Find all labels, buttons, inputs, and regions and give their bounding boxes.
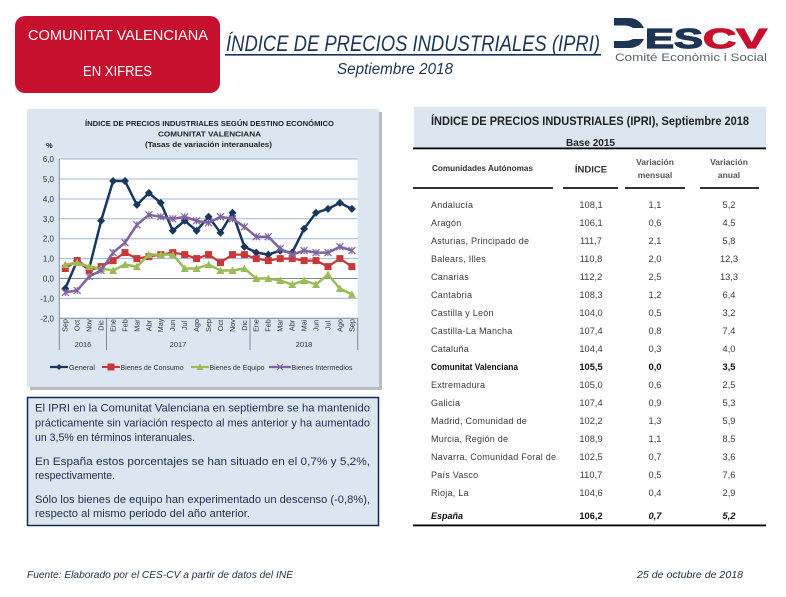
table rows: 1,1 bbox=[649, 434, 661, 444]
x axis month labels: Nov bbox=[228, 319, 237, 332]
table rows: Aragón bbox=[431, 218, 462, 228]
table column headers: Comunidades Autónomas bbox=[432, 163, 533, 173]
text box: summary bbox=[28, 398, 378, 526]
x axis month labels: Ene bbox=[108, 319, 118, 332]
x axis month labels: Ago bbox=[192, 319, 201, 332]
table rows: 3,2 bbox=[723, 308, 735, 318]
text box: summary: un 3,5% en términos interanuales. bbox=[35, 432, 195, 444]
table total row: España: 5,2 bbox=[723, 511, 736, 521]
table rows: 5,9 bbox=[723, 416, 735, 426]
table rows: Balears, Illes bbox=[431, 254, 486, 264]
x axis year labels bbox=[75, 340, 312, 349]
table rows: 0,3 bbox=[649, 344, 661, 354]
table rows: Andalucía bbox=[431, 200, 473, 210]
table rows: 0,8 bbox=[649, 326, 661, 336]
table rows: 108,9 bbox=[579, 434, 603, 444]
table rows: País Vasco bbox=[431, 470, 478, 480]
table rows: Cantabria bbox=[431, 290, 472, 300]
table rows: 110,7 bbox=[580, 470, 602, 480]
table rows: 102,2 bbox=[579, 416, 603, 426]
x axis month labels: Dic bbox=[240, 320, 249, 331]
text box: summary: respecto al mismo periodo del año anterior. bbox=[35, 508, 250, 520]
x axis year labels: 2018 bbox=[296, 340, 312, 349]
table column headers: mensual bbox=[638, 170, 672, 180]
x axis month labels: Ene bbox=[252, 319, 261, 332]
red badge: Comunitat Valenciana en xifres: COMUNITAT VALENCIANA bbox=[28, 27, 208, 44]
table column headers: ÍNDICE bbox=[575, 164, 607, 176]
table rows: 7,4 bbox=[723, 326, 735, 336]
table rows: Castilla-La Mancha bbox=[431, 326, 513, 336]
table column headers: anual bbox=[718, 170, 740, 180]
chart legend: Bienes de Consumo bbox=[120, 363, 184, 372]
table rows: 104,0 bbox=[579, 308, 603, 318]
table rows: 112,2 bbox=[580, 272, 602, 282]
table rows: Murcia, Región de bbox=[431, 434, 508, 444]
x axis month labels: Dic bbox=[96, 320, 106, 331]
table rows: 0,5 bbox=[649, 470, 661, 480]
table rows: 108,1 bbox=[579, 200, 603, 210]
x axis month labels: Abr bbox=[144, 319, 153, 331]
table rows: 12,3 bbox=[720, 254, 738, 264]
x axis month labels: Ago bbox=[335, 319, 344, 332]
x axis month labels: Mar bbox=[132, 319, 141, 332]
series: Bienes de Equipo bbox=[65, 255, 352, 294]
logo: CES-CV: CV bbox=[703, 23, 768, 54]
table rows: 5,8 bbox=[723, 236, 735, 246]
table rows: 5,3 bbox=[723, 398, 735, 408]
subtitle: date: Septiembre 2018 bbox=[337, 61, 453, 78]
table rows: 111,7 bbox=[580, 236, 602, 246]
table rows: 1,1 bbox=[649, 200, 661, 210]
table column headers: Variación bbox=[710, 157, 748, 167]
x axis month labels: May bbox=[156, 318, 165, 332]
table rows: 107,4 bbox=[579, 398, 603, 408]
table rows: 0,4 bbox=[649, 488, 661, 498]
chart title: % bbox=[46, 141, 53, 150]
table rows: 0,6 bbox=[649, 218, 661, 228]
table rows: 4,0 bbox=[723, 344, 735, 354]
table rows: Rioja, La bbox=[431, 488, 469, 498]
series: Bienes Intermedios bbox=[65, 215, 352, 292]
x axis month labels: Sep bbox=[204, 319, 213, 332]
table rows: Canarias bbox=[431, 272, 469, 282]
y axis labels: -2,0 bbox=[40, 314, 55, 323]
table rows: 104,6 bbox=[579, 488, 603, 498]
table rows: 2,9 bbox=[723, 488, 735, 498]
text box: summary: En España estos porcentajes se han situado en el 0,7% y 5,2%, bbox=[35, 456, 370, 468]
footer: source: Fuente: Elaborado por el CES-CV a partir de datos del INE bbox=[27, 569, 294, 581]
x axis month labels: Nov bbox=[85, 319, 94, 332]
table column headers bbox=[413, 157, 759, 189]
table rows: 13,3 bbox=[720, 272, 738, 282]
table rows: 2,5 bbox=[649, 272, 661, 282]
table rows: 102,5 bbox=[579, 452, 603, 462]
table rows: 0,9 bbox=[649, 398, 661, 408]
table rows: 8,5 bbox=[723, 434, 735, 444]
chart title: ÍNDICE DE PRECIOS INDUSTRIALES SEGÚN DESTINO ECONÓMICO bbox=[85, 119, 334, 128]
x axis month labels: Jun bbox=[168, 320, 177, 331]
table rows: 107,4 bbox=[579, 326, 603, 336]
logo: CES-CV: ES bbox=[645, 23, 703, 54]
x axis month labels: Feb bbox=[120, 319, 129, 332]
table rows: 0,7 bbox=[649, 452, 661, 462]
chart title bbox=[46, 119, 334, 150]
table rows: 0,0 bbox=[649, 362, 661, 372]
series: General bbox=[65, 181, 352, 288]
y axis labels: 0,0 bbox=[43, 274, 55, 284]
footer: date: 25 de octubre de 2018 bbox=[636, 569, 743, 581]
table rows: 105,0 bbox=[579, 380, 603, 390]
y axis labels: 3,0 bbox=[43, 215, 55, 224]
y axis labels: 2,0 bbox=[43, 235, 55, 244]
table rows: 1,2 bbox=[649, 290, 661, 300]
chart legend: Bienes de Equipo bbox=[210, 363, 264, 372]
table rows: 108,3 bbox=[579, 290, 603, 300]
table rows: 104,4 bbox=[579, 344, 603, 354]
table rows: 105,5 bbox=[579, 362, 603, 372]
text box: summary: prácticamente sin variación respecto al mes anterior y ha aumentado bbox=[35, 418, 370, 430]
x axis month labels: Jul bbox=[323, 321, 332, 330]
table heading bbox=[413, 107, 766, 149]
x axis month labels: Feb bbox=[264, 319, 273, 332]
x axis year labels: 2017 bbox=[170, 340, 186, 349]
x axis month labels: Abr bbox=[288, 319, 297, 331]
table rows: 0,6 bbox=[649, 380, 661, 390]
y axis labels bbox=[40, 155, 55, 323]
logo: CES-CV bbox=[614, 18, 768, 64]
chart title: COMUNITAT VALENCIANA bbox=[158, 130, 262, 138]
y axis labels: 1,0 bbox=[43, 255, 55, 264]
series: Bienes de Consumo bbox=[65, 253, 352, 270]
y axis labels: 6,0 bbox=[43, 155, 55, 164]
main title: ÍNDICE DE PRECIOS INDUSTRIALES (IPRI) bbox=[226, 31, 600, 56]
text box: summary: Sólo los bienes de equipo han experimentado un descenso (-0,8%), bbox=[35, 494, 370, 506]
table rows: 110,8 bbox=[580, 254, 602, 264]
x axis month labels: Sep bbox=[347, 319, 356, 332]
x axis year labels: 2016 bbox=[75, 340, 91, 349]
panel: line chart bbox=[27, 109, 382, 390]
table rows: 4,5 bbox=[723, 218, 735, 228]
table rows: 2,5 bbox=[723, 380, 735, 390]
text box: summary: El IPRI en la Comunitat Valenciana en septiembre se ha mantenido bbox=[35, 402, 370, 414]
x axis month labels: Mar bbox=[276, 319, 285, 332]
table rows: Extremadura bbox=[431, 380, 485, 390]
table rows: 106,1 bbox=[579, 218, 603, 228]
chart legend bbox=[50, 363, 353, 372]
x axis month labels: Sep bbox=[61, 319, 70, 332]
text box: summary: respectivamente. bbox=[35, 470, 115, 482]
table rows: 3,6 bbox=[723, 452, 735, 462]
table total row: España bbox=[413, 511, 766, 526]
table rows: Galicia bbox=[431, 398, 460, 408]
table rows: 1,3 bbox=[649, 416, 661, 426]
table rows: 5,2 bbox=[723, 200, 735, 210]
table rows: Navarra, Comunidad Foral de bbox=[431, 452, 556, 462]
table rows: Cataluña bbox=[431, 344, 469, 354]
x axis month labels bbox=[61, 318, 356, 332]
chart legend: Bienes Intermedios bbox=[292, 363, 353, 372]
table heading: ÍNDICE DE PRECIOS INDUSTRIALES (IPRI), Septiembre 2018 bbox=[431, 113, 749, 128]
logo: CES-CV: Comité Econòmic i Social bbox=[615, 52, 767, 64]
y axis labels: 5,0 bbox=[43, 175, 55, 184]
table rows: 0,5 bbox=[649, 308, 661, 318]
table rows: 7,6 bbox=[723, 470, 735, 480]
table heading: Base 2015 bbox=[566, 137, 615, 149]
table rows: Madrid, Comunidad de bbox=[431, 416, 527, 426]
table rows bbox=[431, 200, 738, 498]
x axis month labels: Oct bbox=[216, 320, 225, 331]
table total row: España: España bbox=[431, 511, 463, 521]
x axis month labels: Jun bbox=[311, 320, 320, 331]
y axis labels: -1,0 bbox=[40, 294, 55, 303]
table rows: 3,5 bbox=[723, 362, 735, 372]
plot area and grid bbox=[59, 159, 358, 350]
table rows: Castilla y León bbox=[431, 308, 494, 318]
table rows: Comunitat Valenciana bbox=[431, 362, 519, 372]
table rows: Asturias, Principado de bbox=[431, 236, 529, 246]
table rows: 6,4 bbox=[723, 290, 735, 300]
chart legend: General bbox=[69, 363, 95, 372]
panel: data table bbox=[413, 107, 766, 526]
table column headers: Variación bbox=[636, 157, 674, 167]
red badge: Comunitat Valenciana en xifres: EN XIFRES bbox=[83, 63, 152, 80]
x axis month labels: Oct bbox=[73, 320, 82, 331]
x axis month labels: Mai bbox=[300, 319, 308, 331]
chart title: (Tasas de variación interanuales) bbox=[145, 140, 273, 149]
table total row: España: 106,2 bbox=[579, 511, 603, 521]
red badge: Comunitat Valenciana en xifres bbox=[15, 16, 220, 93]
table rows: 2,1 bbox=[649, 236, 661, 246]
y axis labels: 4,0 bbox=[43, 195, 55, 204]
table total row: España: 0,7 bbox=[649, 511, 662, 521]
table rows: 2,0 bbox=[649, 254, 661, 264]
x axis month labels: Jul bbox=[180, 321, 189, 330]
